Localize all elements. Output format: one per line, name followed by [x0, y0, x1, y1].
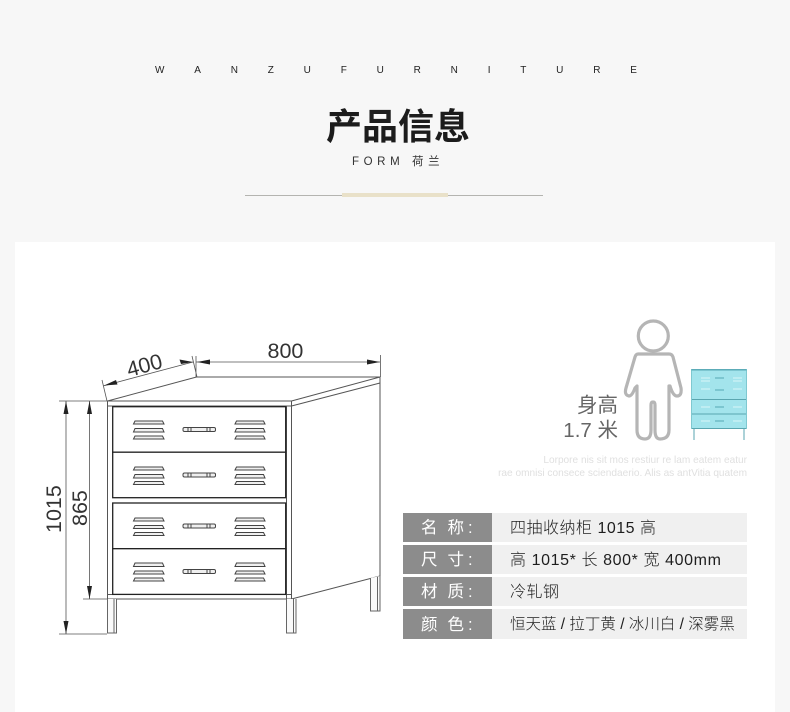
row: size: 高 1015* 长 800* 宽 400mm — [510, 552, 722, 569]
row: colour: 恒天蓝 / 拉丁黄 / 冰川白 / 深雾黑 — [510, 616, 735, 633]
drawers — [113, 407, 286, 594]
row: material: 材 质: — [421, 583, 473, 601]
placeholder caption: Lorpore nis sit mos restiur re lam eatem eatur — [543, 455, 747, 466]
icon: person silhouette — [624, 319, 683, 441]
row: size: 尺 寸: — [421, 551, 473, 569]
brand line: Z — [268, 65, 274, 76]
brand line: A — [194, 65, 201, 76]
dimension labels: 800 — [268, 339, 303, 363]
divider with accent — [245, 193, 543, 197]
brand line: U — [556, 65, 563, 76]
leg: front left — [108, 599, 116, 633]
row: material — [403, 577, 747, 606]
brand line — [155, 65, 637, 76]
dimension lines — [59, 355, 380, 634]
dimension labels: 400 — [124, 349, 165, 382]
row: name — [403, 513, 747, 542]
brand line: N — [231, 65, 238, 76]
row: material: 冷轧钢 — [510, 584, 560, 601]
brand line: E — [630, 65, 637, 76]
title: 产品信息 — [326, 106, 470, 147]
row: name: 名 称: — [421, 519, 473, 537]
leg: rear right — [370, 576, 380, 611]
height label: 身高 — [577, 394, 618, 417]
brand line: N — [451, 65, 458, 76]
placeholder caption: rae omnisi consece sciendaerio. Alis as antVitia quatem — [498, 468, 747, 479]
spec table — [403, 513, 747, 639]
brand line: R — [414, 65, 421, 76]
brand line: F — [341, 65, 347, 76]
brand line: W — [155, 65, 164, 76]
placeholder caption — [498, 455, 747, 479]
dimension labels: 865 — [68, 490, 92, 526]
subtitle: FORM 荷兰 — [352, 156, 444, 168]
brand line: R — [593, 65, 600, 76]
row: colour — [403, 609, 747, 639]
row: name: 四抽收纳柜 1015 高 — [510, 520, 656, 537]
row: colour: 颜 色: — [421, 616, 473, 634]
dimension labels — [42, 339, 303, 533]
vents and handles — [134, 421, 265, 581]
leg: front right — [286, 599, 296, 633]
height label — [563, 394, 618, 442]
brand line: I — [488, 65, 490, 76]
brand line: U — [304, 65, 311, 76]
panel: product details — [15, 242, 775, 712]
row: size — [403, 545, 747, 574]
dimension labels: 1015 — [42, 485, 66, 533]
brand line: T — [520, 65, 526, 76]
height label: 1.7 米 — [563, 419, 618, 442]
cabinet body — [108, 377, 380, 633]
brand line: U — [377, 65, 384, 76]
illustration: mint cabinet — [691, 369, 747, 440]
